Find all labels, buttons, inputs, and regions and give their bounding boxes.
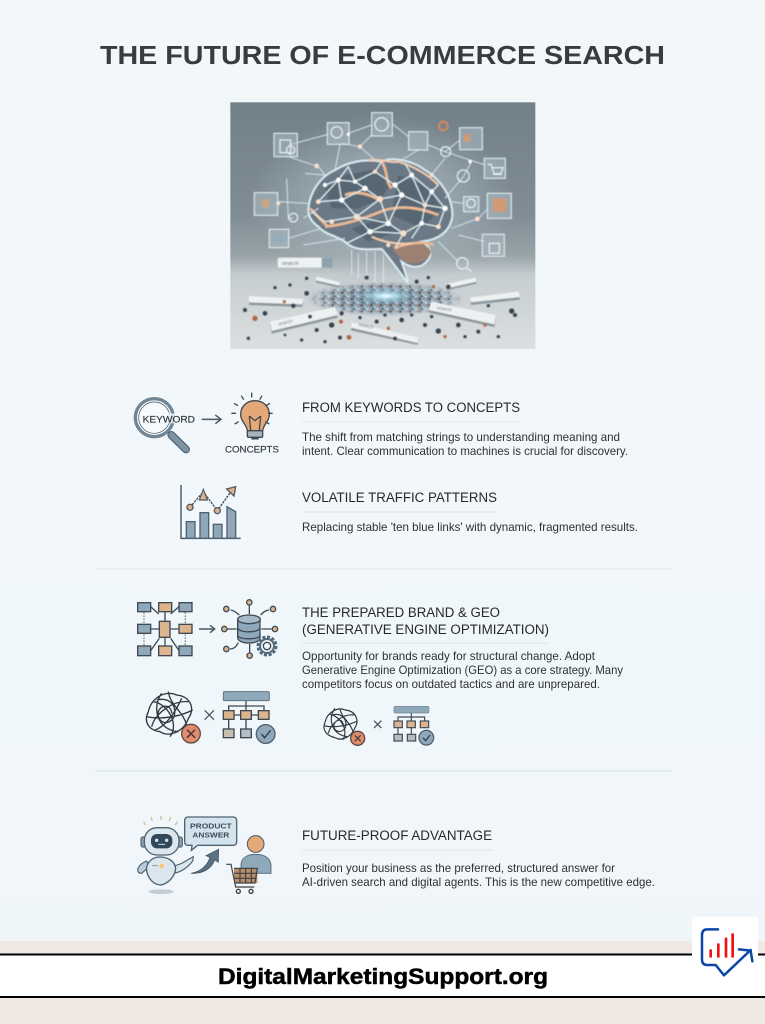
particle swirl bbox=[307, 282, 463, 316]
card glyphs bbox=[280, 118, 503, 272]
section 3 heading: (GENERATIVE ENGINE OPTIMIZATION) bbox=[302, 622, 549, 637]
hero image: AI brain network above scattered search bars: search bbox=[358, 322, 374, 331]
section 1 body: The shift from matching strings to understanding meaning and bbox=[302, 431, 620, 444]
icon: database with gear bbox=[222, 600, 278, 658]
brain bbox=[308, 159, 452, 282]
arrow bbox=[199, 625, 215, 633]
icon cards bbox=[254, 113, 511, 256]
section 3 heading: THE PREPARED BRAND & GEO bbox=[302, 605, 500, 620]
orange and white brain nodes bbox=[276, 144, 480, 247]
speech bubble: product answer bbox=[185, 817, 237, 850]
curved arrow bbox=[191, 849, 219, 873]
hero image: AI brain network above scattered search bars: search bbox=[277, 318, 294, 328]
hero image: AI brain network above scattered search bars bbox=[230, 102, 535, 349]
icon: ordered hierarchy with check bbox=[223, 692, 275, 743]
title: THE FUTURE OF E-COMMERCE SEARCH bbox=[100, 42, 665, 70]
icon: light bulb bbox=[231, 393, 273, 439]
speech bubble: product answer: ANSWER bbox=[192, 831, 230, 840]
section 4 heading: FUTURE-PROOF ADVANTAGE bbox=[302, 828, 492, 843]
section 3 heading bbox=[302, 605, 549, 637]
section 4 body: AI-driven search and digital agents. This is the new competitive edge. bbox=[302, 876, 655, 889]
footer website text: DigitalMarketingSupport.org bbox=[218, 964, 548, 989]
section 4 body bbox=[302, 862, 655, 889]
section 2 heading: VOLATILE TRAFFIC PATTERNS bbox=[302, 490, 497, 505]
section 3 body: Opportunity for brands ready for structural change. Adopt bbox=[302, 650, 596, 663]
section 4 icon: robot answering shopper bbox=[138, 816, 271, 894]
hero image: AI brain network above scattered search bars: search bbox=[436, 305, 452, 314]
scattered dots bbox=[243, 276, 517, 343]
arrow bbox=[202, 415, 221, 424]
icon: volatile traffic chart bbox=[181, 485, 241, 538]
section 1 body bbox=[302, 431, 628, 458]
times symbol bbox=[205, 710, 214, 720]
search bar floating: search bbox=[282, 261, 299, 267]
data streams bbox=[352, 250, 383, 283]
section 3 body: competitors focus on outdated tactics and are unprepared. bbox=[302, 678, 600, 691]
robot bbox=[138, 816, 193, 894]
icon: magnifying glass with keyword bbox=[135, 399, 195, 449]
section 1 icon: keyword to concepts bbox=[135, 393, 279, 538]
shopping cart bbox=[226, 864, 257, 893]
small icon: chaos versus hierarchy bbox=[324, 706, 434, 745]
section 3 body: Generative Engine Optimization (GEO) as a core strategy. Many bbox=[302, 664, 623, 677]
fallen search bars bbox=[249, 279, 520, 345]
speech bubble: product answer: PRODUCT bbox=[190, 821, 232, 830]
shopper bbox=[241, 836, 271, 873]
icon: tangled web with cross bbox=[146, 692, 200, 743]
label: concepts: CONCEPTS bbox=[225, 444, 279, 454]
section 2 body: Replacing stable 'ten blue links' with dynamic, fragmented results. bbox=[302, 521, 638, 534]
section 3 icons: structured data and order from chaos bbox=[138, 600, 278, 743]
section 3 body bbox=[302, 650, 623, 691]
section 1 body: intent. Clear communication to machines is crucial for discovery. bbox=[302, 445, 628, 458]
logo: chart speech bubble bbox=[692, 917, 758, 977]
icon: magnifying glass with keyword: KEYWORD bbox=[143, 414, 195, 424]
network lines bbox=[278, 123, 488, 262]
section 1 heading: FROM KEYWORDS TO CONCEPTS bbox=[302, 400, 520, 415]
search bar floating bbox=[278, 258, 333, 268]
section 4 body: Position your business as the preferred, structured answer for bbox=[302, 862, 615, 875]
icon: content grid bbox=[138, 603, 192, 656]
footer band bbox=[0, 941, 765, 1024]
